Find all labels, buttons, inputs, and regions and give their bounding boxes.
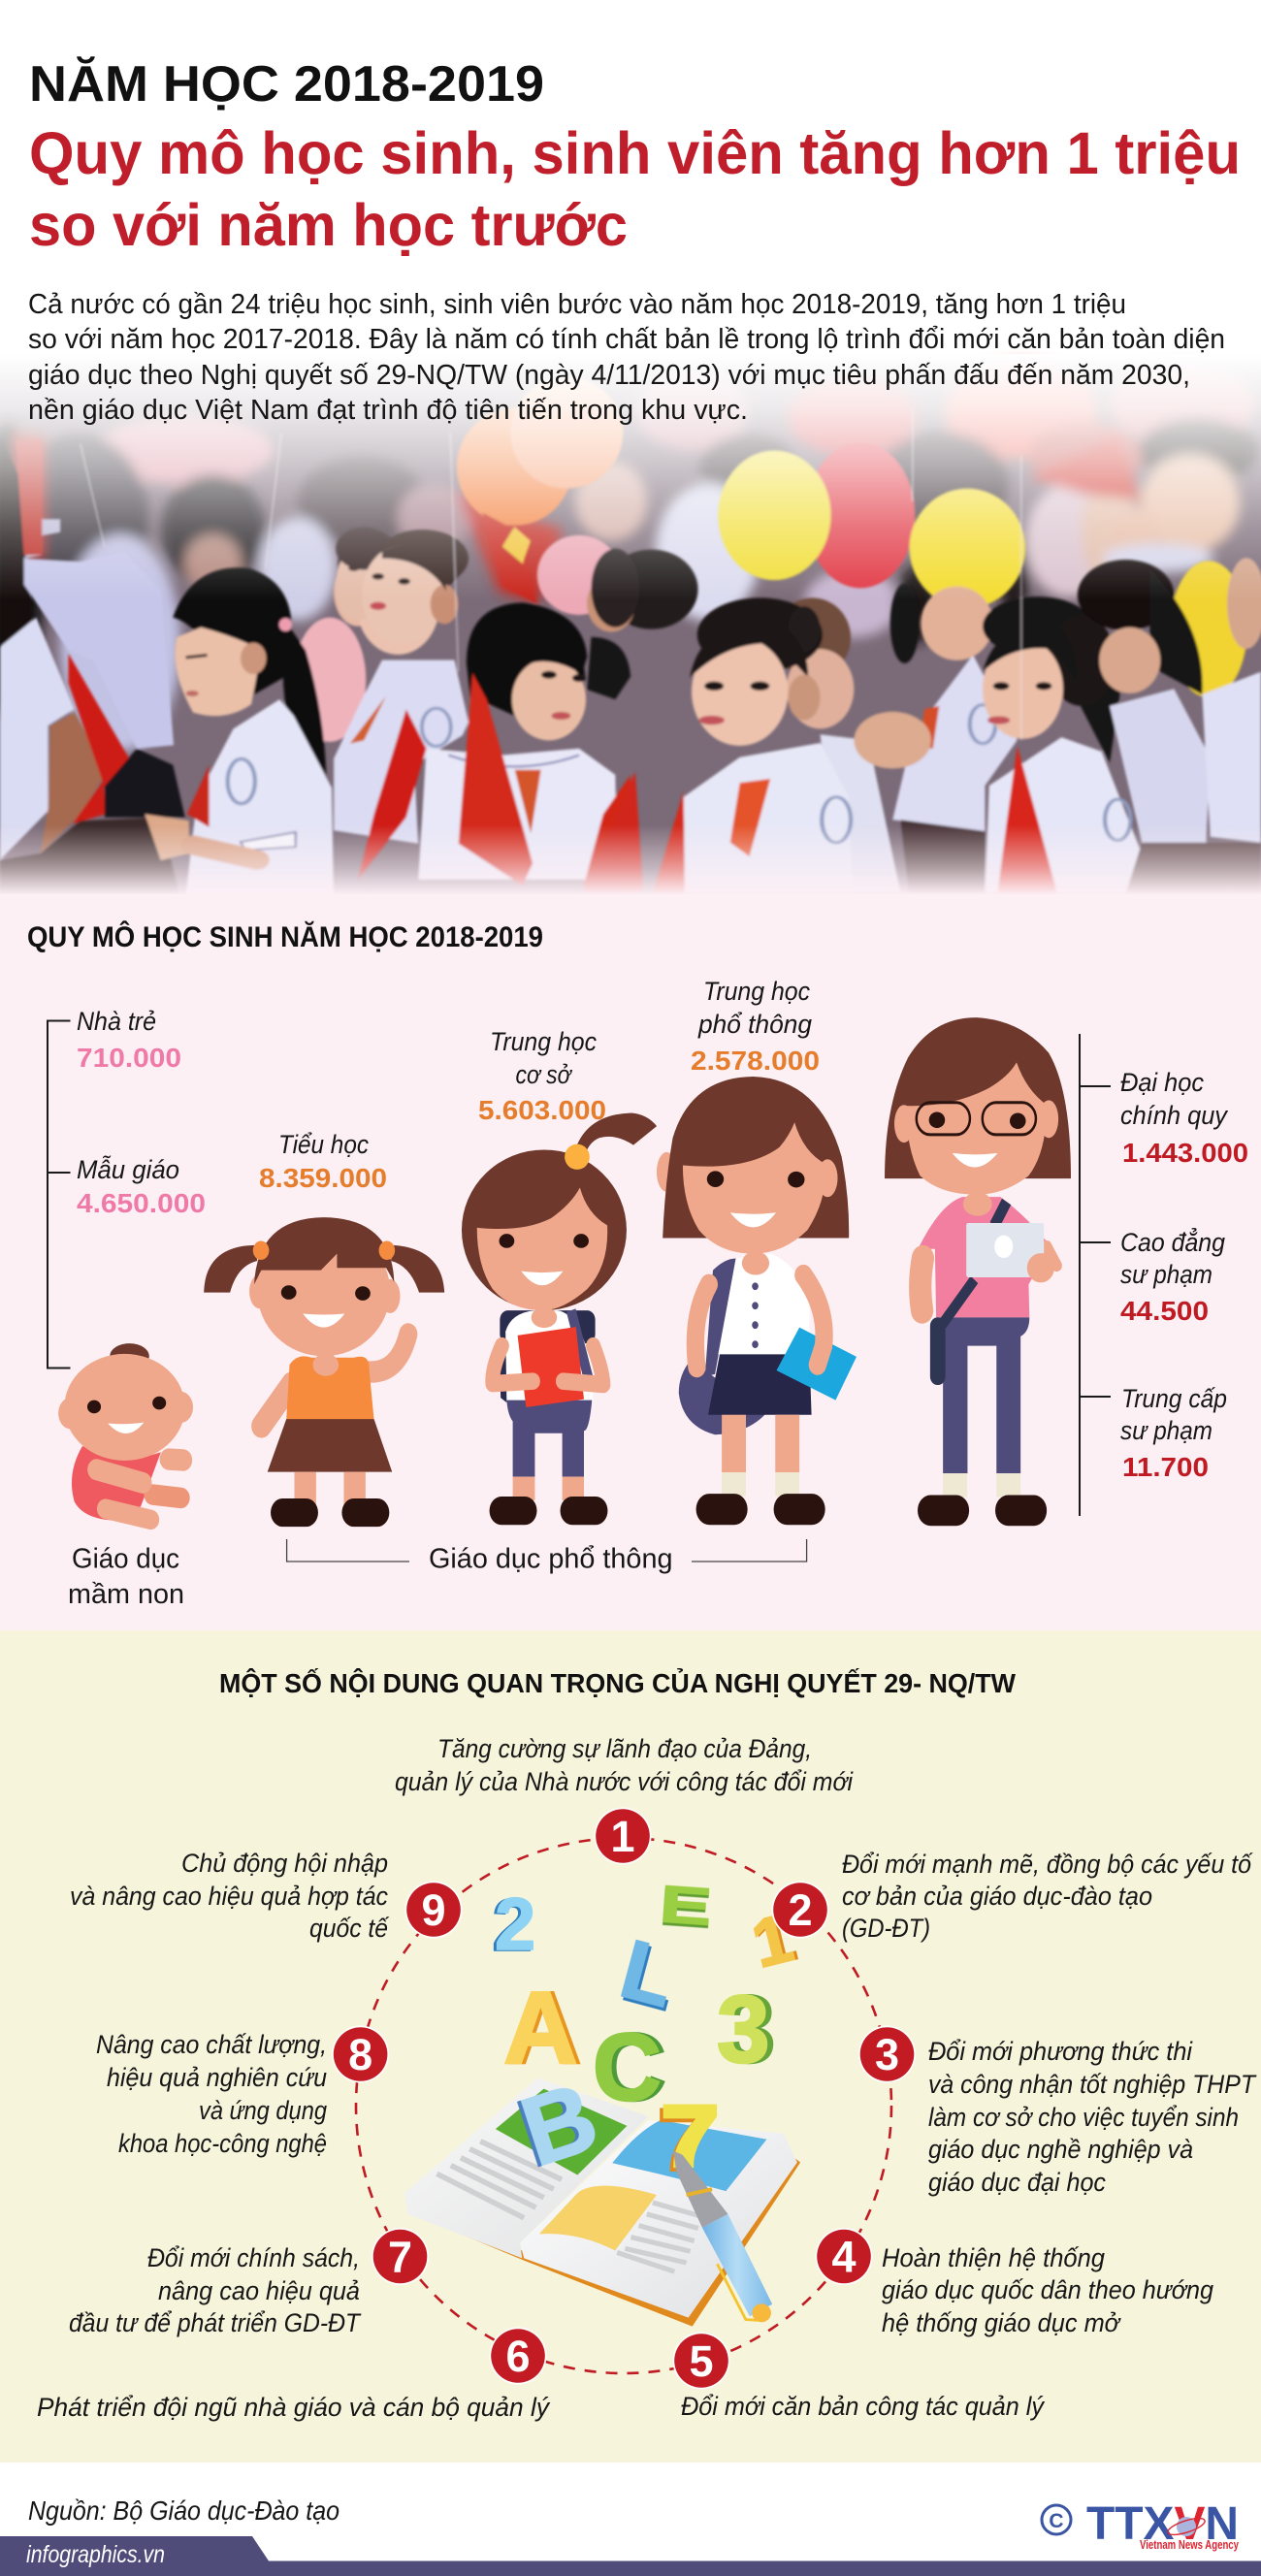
title: red headline line 2: so với năm học trước — [29, 192, 628, 258]
label: preschool education: Giáo dục — [72, 1544, 179, 1575]
node 7 — [372, 2228, 429, 2285]
panel: resolution 29 beige background — [0, 1630, 1261, 2463]
node 8 — [332, 2025, 389, 2083]
logo: copyright mark: C — [1049, 2510, 1064, 2532]
pink section background — [0, 894, 1261, 1630]
label: lower secondary: 5.603.000 — [478, 1095, 606, 1125]
panel heading: MỘT SỐ NỘI DUNG QUAN TRỌNG CỦA NGHỊ QUYẾT 29- NQ/TW — [219, 1667, 1016, 1698]
photo bottom fade — [0, 824, 1261, 895]
node 2: 2 — [788, 1885, 813, 1935]
node 6: 6 — [505, 2332, 531, 2381]
label: upper secondary: Trung học — [703, 977, 810, 1006]
label: kindergarten: Mẫu giáo — [77, 1155, 179, 1184]
label: university: 1.443.000 — [1122, 1138, 1248, 1168]
label: nursery — [77, 1007, 181, 1073]
bracket: general education — [287, 1539, 807, 1562]
text: item 7: Đổi mới chính sách, — [147, 2243, 360, 2272]
text: item 9 — [70, 1849, 390, 1943]
node 4: 4 — [831, 2233, 857, 2281]
text: item 4: giáo dục quốc dân theo hướng — [882, 2275, 1213, 2304]
label: primary — [259, 1130, 387, 1193]
intro text: Cả nước có gần 24 triệu học sinh, sinh viên bước vào năm học 2018-2019, tăng hơn 1 triệu — [28, 289, 1126, 320]
photo top fade — [0, 354, 1261, 601]
figure: primary school girl — [204, 1217, 444, 1527]
node 1: 1 — [610, 1812, 635, 1861]
text: item 4: hệ thống giáo dục mở — [882, 2308, 1122, 2337]
digit 3: 3 — [717, 1976, 770, 2082]
node 3: 3 — [875, 2030, 899, 2079]
letter B: B — [509, 2062, 609, 2187]
text: item 8: khoa học-công nghệ — [118, 2129, 327, 2158]
label: upper secondary — [691, 977, 820, 1076]
right half, top-view coordinates — [81, 410, 1261, 892]
text: item 8: Nâng cao chất lượng, — [96, 2030, 327, 2059]
label: teacher college: 44.500 — [1120, 1296, 1209, 1326]
bracket: preschool — [48, 1020, 70, 1368]
left half, close-up coordinates — [0, 437, 639, 902]
label: lower secondary — [478, 1027, 606, 1125]
photo: schoolchildren with flags and balloons — [0, 354, 1261, 902]
figure: lower secondary girl with red book — [462, 1112, 657, 1525]
title: school year: NĂM HỌC 2018-2019 — [29, 56, 544, 113]
node 5 — [673, 2332, 729, 2390]
figure: baby — [58, 1343, 193, 1521]
intro text — [28, 289, 1225, 426]
title block — [29, 56, 1241, 258]
letter L: L — [612, 1923, 684, 2024]
figure: upper secondary girl with blue book — [657, 1077, 857, 1525]
text: item 5: Đổi mới căn bản công tác quản lý — [681, 2392, 1045, 2421]
text: item 9: quốc tế — [309, 1914, 390, 1943]
footer site name: infographics.vn — [26, 2541, 165, 2568]
letter C: C — [593, 2013, 662, 2120]
text: item 1 — [395, 1734, 854, 1796]
text: item 7: nâng cao hiệu quả — [158, 2276, 360, 2305]
text: item 3: giáo dục nghề nghiệp và — [928, 2135, 1193, 2164]
text: item 3: giáo dục đại học — [928, 2168, 1106, 2197]
node 7: 7 — [388, 2233, 412, 2281]
label: university — [1120, 1068, 1248, 1168]
node 6 — [489, 2328, 547, 2384]
intro text: giáo dục theo Nghị quyết số 29-NQ/TW (ngày 4/11/2013) với mục tiêu phấn đấu đến năm 2030, — [28, 360, 1190, 391]
logo: TTXVN: TTXVN — [1086, 2498, 1239, 2550]
intro text: nền giáo dục Việt Nam đạt trình độ tiên tiến trong khu vực. — [28, 395, 748, 426]
illustration: dashed ring — [356, 1838, 891, 2373]
label: nursery: 710.000 — [77, 1043, 181, 1073]
logo: copyright mark — [1042, 2505, 1071, 2534]
text: item 6: Phát triển đội ngũ nhà giáo và cán bộ quản lý — [37, 2393, 550, 2422]
text: item 2: cơ bản của giáo dục-đào tạo — [842, 1882, 1152, 1911]
text: item 1: Tăng cường sự lãnh đạo của Đảng, — [437, 1734, 812, 1763]
text: item 8 — [96, 2030, 327, 2158]
text: item 8: hiệu quả nghiên cứu — [107, 2063, 327, 2092]
footer bar — [0, 2536, 1261, 2576]
intro text: so với năm học 2017-2018. Đây là năm có tính chất bản lề trong lộ trình đổi mới căn bản toàn diện — [28, 324, 1225, 355]
text: item 3 — [928, 2037, 1257, 2197]
node 9 — [405, 1882, 462, 1938]
label: kindergarten: 4.650.000 — [77, 1188, 206, 1218]
label: preschool education: mầm non — [68, 1579, 184, 1610]
label: university: chính quy — [1120, 1101, 1228, 1130]
digit 7: 7 — [662, 2088, 719, 2184]
node 3 — [858, 2025, 916, 2083]
text: item 9: Chủ động hội nhập — [181, 1849, 388, 1878]
node 2 — [772, 1882, 828, 1938]
letter A: A — [503, 1971, 578, 2085]
figure: university student with tablet — [885, 1017, 1071, 1526]
node 8: 8 — [348, 2030, 372, 2079]
label: teacher vocational — [1120, 1384, 1227, 1482]
illustration: flying letters — [495, 1875, 799, 2120]
title: red headline line 1: Quy mô học sinh, sinh viên tăng hơn 1 triệu — [29, 120, 1241, 186]
label: lower secondary: Trung học — [490, 1027, 597, 1056]
text: item 8: và ứng dụng — [199, 2096, 327, 2125]
label: teacher vocational: 11.700 — [1122, 1452, 1209, 1482]
text: item 4 — [882, 2243, 1213, 2337]
label: upper secondary: 2.578.000 — [691, 1046, 820, 1076]
label: teacher vocational: Trung cấp — [1121, 1384, 1227, 1413]
node 1 — [594, 1808, 652, 1864]
text: item 7: đầu tư để phát triển GD-ĐT — [69, 2308, 362, 2337]
label: teacher vocational: sư phạm — [1120, 1416, 1212, 1445]
label: general education: Giáo dục phổ thông — [429, 1544, 673, 1575]
letter 2: 2 — [495, 1884, 535, 1966]
illustration: open book and pen — [404, 2062, 800, 2327]
source line: Nguồn: Bộ Giáo dục-Đào tạo — [28, 2496, 340, 2526]
label: university: Đại học — [1120, 1068, 1204, 1097]
bracket: higher education — [1080, 1034, 1111, 1516]
label: kindergarten — [77, 1155, 206, 1218]
balloons and upper figures, top-view coordinates — [334, 377, 1261, 697]
text: item 2: (GD-ĐT) — [842, 1914, 930, 1943]
label: upper secondary: phổ thông — [697, 1010, 812, 1039]
letter E: E — [658, 1875, 714, 1936]
label: teacher college: Cao đẳng — [1120, 1226, 1225, 1257]
label: primary: 8.359.000 — [259, 1163, 387, 1193]
label: teacher college: sư phạm — [1120, 1260, 1212, 1289]
label: lower secondary: cơ sở — [516, 1060, 573, 1089]
node 9: 9 — [421, 1885, 446, 1935]
text: item 4: Hoàn thiện hệ thống — [882, 2243, 1105, 2272]
label: primary: Tiểu học — [278, 1130, 369, 1159]
text: item 9: và nâng cao hiệu quả hợp tác — [70, 1882, 388, 1911]
section heading: student numbers: QUY MÔ HỌC SINH NĂM HỌC 2018-2019 — [27, 920, 543, 953]
node 5: 5 — [689, 2336, 714, 2386]
text: item 2 — [842, 1850, 1253, 1943]
label: preschool education — [68, 1544, 184, 1610]
digit 1: 1 — [745, 1899, 799, 1982]
label: nursery: Nhà trẻ — [77, 1007, 156, 1036]
text: item 1: quản lý của Nhà nước với công tác đổi mới — [395, 1767, 854, 1796]
node 4 — [815, 2228, 873, 2285]
text: item 3: Đổi mới phương thức thi — [928, 2037, 1193, 2066]
numbered nodes — [332, 1808, 916, 2390]
text: item 7 — [69, 2243, 362, 2337]
label: teacher college — [1120, 1226, 1225, 1326]
